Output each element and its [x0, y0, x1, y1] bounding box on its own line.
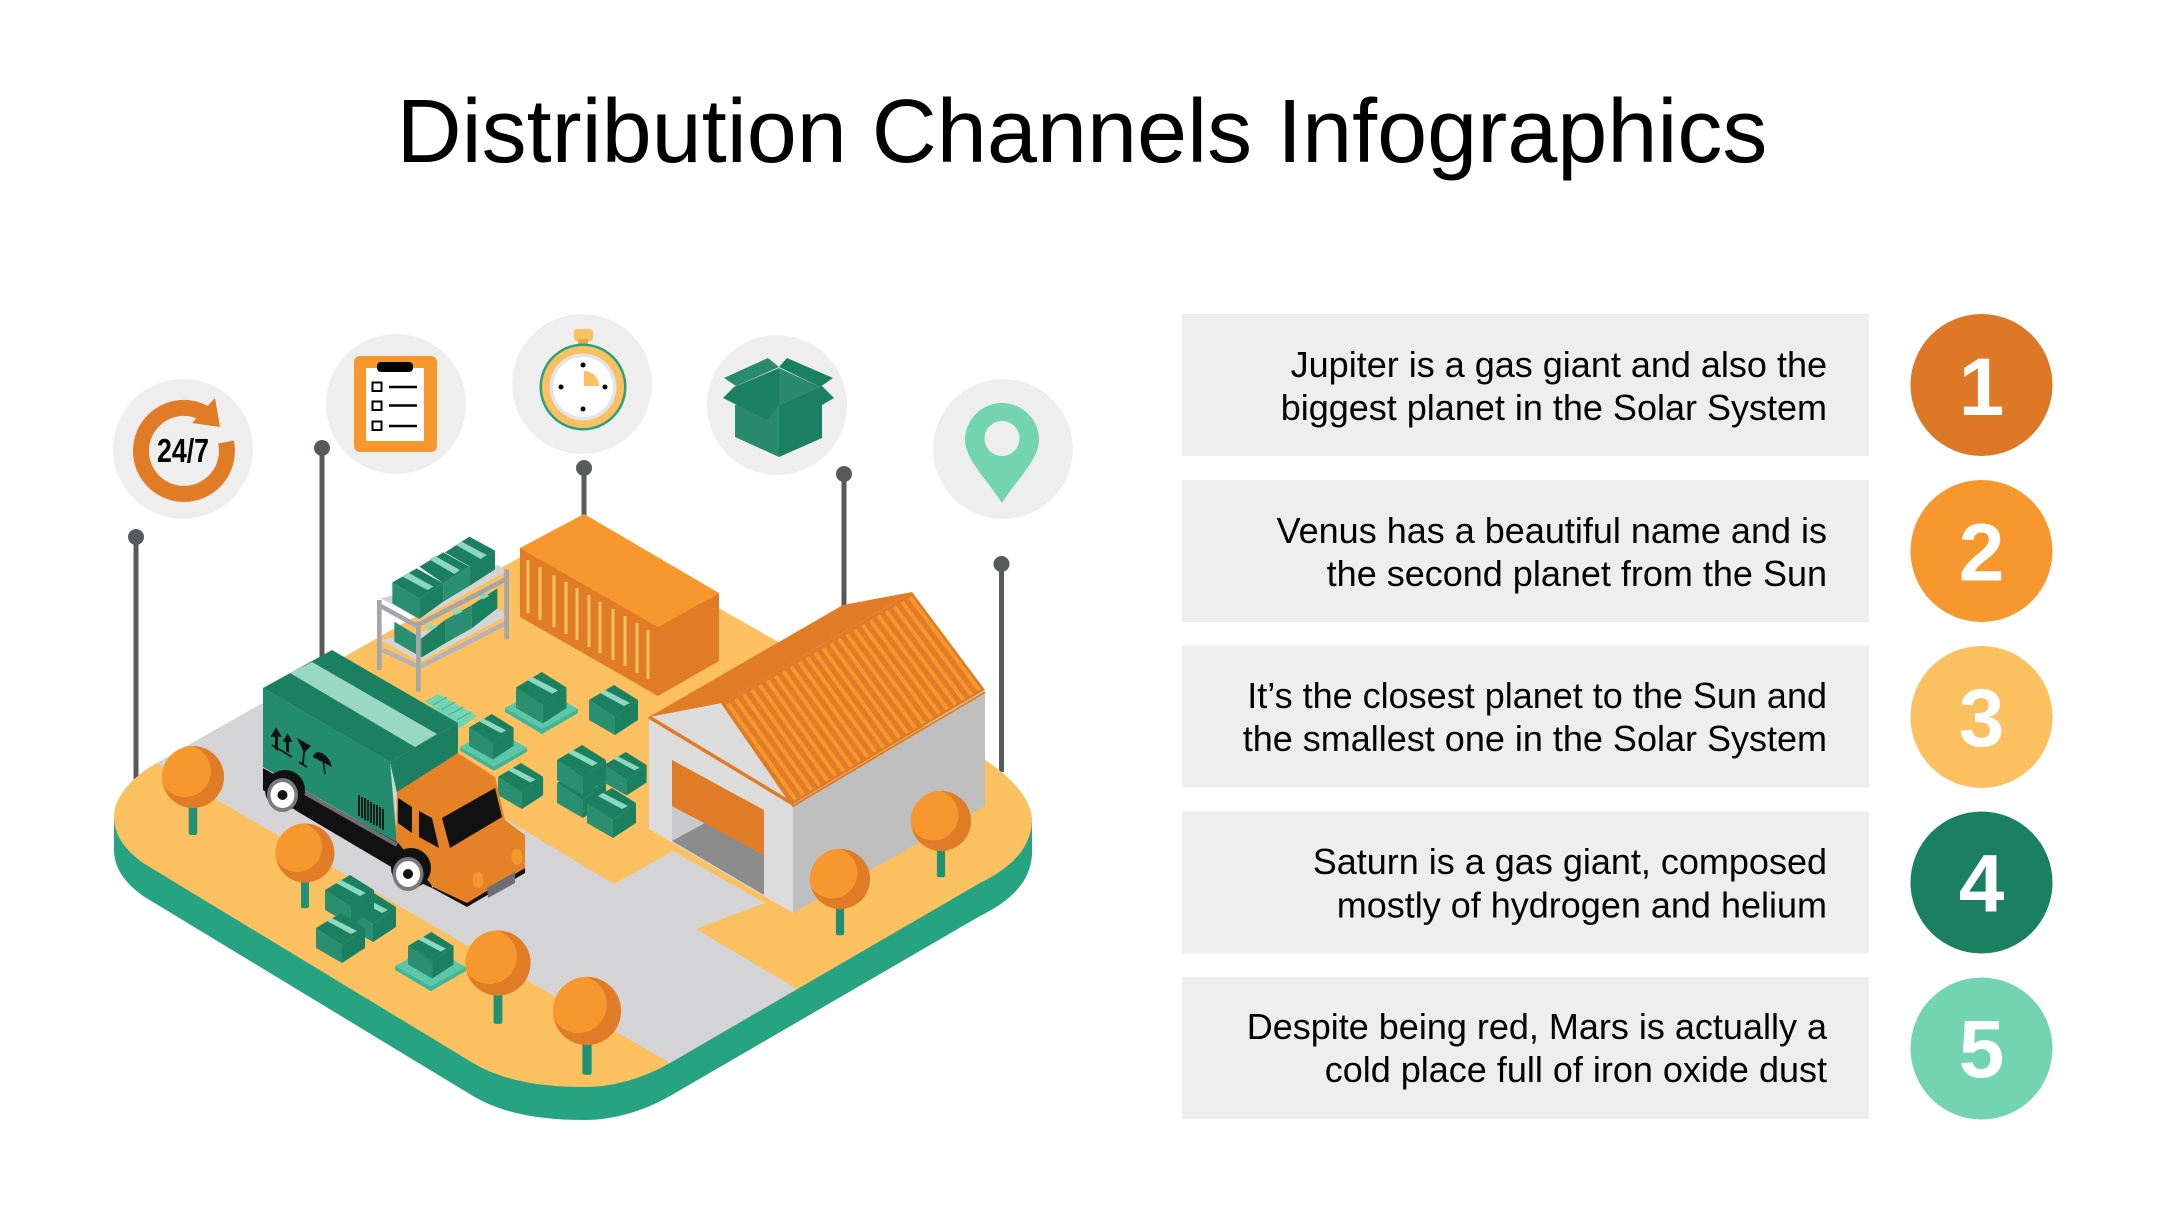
number badge 3: 3 — [1959, 673, 2004, 764]
text: item 3: the smallest one in the Solar System — [1243, 718, 1827, 759]
icon: stopwatch — [512, 314, 652, 454]
panel: item 3 — [1182, 646, 1869, 788]
cargo symbols — [271, 727, 332, 774]
text: item 4: Saturn is a gas giant, composed — [1313, 841, 1827, 882]
number badge 4 — [1910, 812, 2052, 954]
number badge 5 — [1910, 978, 2052, 1120]
icon: open box — [707, 335, 847, 475]
title: Distribution Channels Infographics — [397, 82, 1767, 182]
front boxes — [316, 875, 466, 991]
icon: location pin — [933, 379, 1073, 519]
pole 2 — [314, 440, 330, 658]
panel: item 1 — [1182, 314, 1869, 456]
pole 5 — [994, 556, 1010, 772]
number badge 4: 4 — [1959, 838, 2005, 930]
rear wheel — [265, 770, 305, 812]
warehouse door — [672, 760, 764, 895]
text: item 2: the second planet from the Sun — [1327, 553, 1827, 594]
text: item 3: It’s the closest planet to the Sun and — [1247, 675, 1827, 716]
pole 3 — [576, 460, 592, 518]
number badge 1: 1 — [1959, 342, 2004, 433]
icon: 24/7: 24/7 — [157, 432, 209, 469]
trees — [159, 745, 971, 1075]
shipping container — [520, 514, 719, 696]
panel: item 5 — [1182, 977, 1869, 1119]
text: item 4: mostly of hydrogen and helium — [1337, 884, 1827, 926]
warehouse — [649, 592, 985, 913]
number badge 1 — [1910, 314, 2052, 456]
icon: 24/7 — [113, 379, 253, 519]
text: item 2: Venus has a beautiful name and is — [1277, 510, 1827, 551]
panel: item 4 — [1182, 812, 1869, 954]
barcode — [359, 795, 383, 830]
truck cab — [396, 753, 525, 907]
text: item 5: Despite being red, Mars is actually a — [1247, 1006, 1828, 1047]
road — [157, 689, 797, 1063]
panel: item 2 — [1182, 480, 1869, 622]
boxes on pallets and loose boxes — [460, 672, 647, 838]
text: item 5: cold place full of iron oxide dust — [1325, 1049, 1827, 1090]
number badge 2: 2 — [1959, 508, 2004, 598]
empty pallet — [425, 694, 477, 728]
isometric platform — [114, 526, 1032, 1120]
number badge 5: 5 — [1959, 1004, 2004, 1095]
text: item 1: Jupiter is a gas giant and also the — [1291, 344, 1827, 385]
text: item 1: biggest planet in the Solar System — [1281, 387, 1827, 428]
icon: checklist clipboard — [326, 334, 466, 474]
number badge 2 — [1910, 480, 2052, 622]
pole 4 — [836, 466, 852, 609]
front wheel — [391, 848, 431, 891]
pole 1 — [128, 529, 144, 779]
storage shelf with boxes — [379, 537, 507, 692]
number badge 3 — [1910, 646, 2052, 788]
delivery truck — [263, 650, 525, 907]
